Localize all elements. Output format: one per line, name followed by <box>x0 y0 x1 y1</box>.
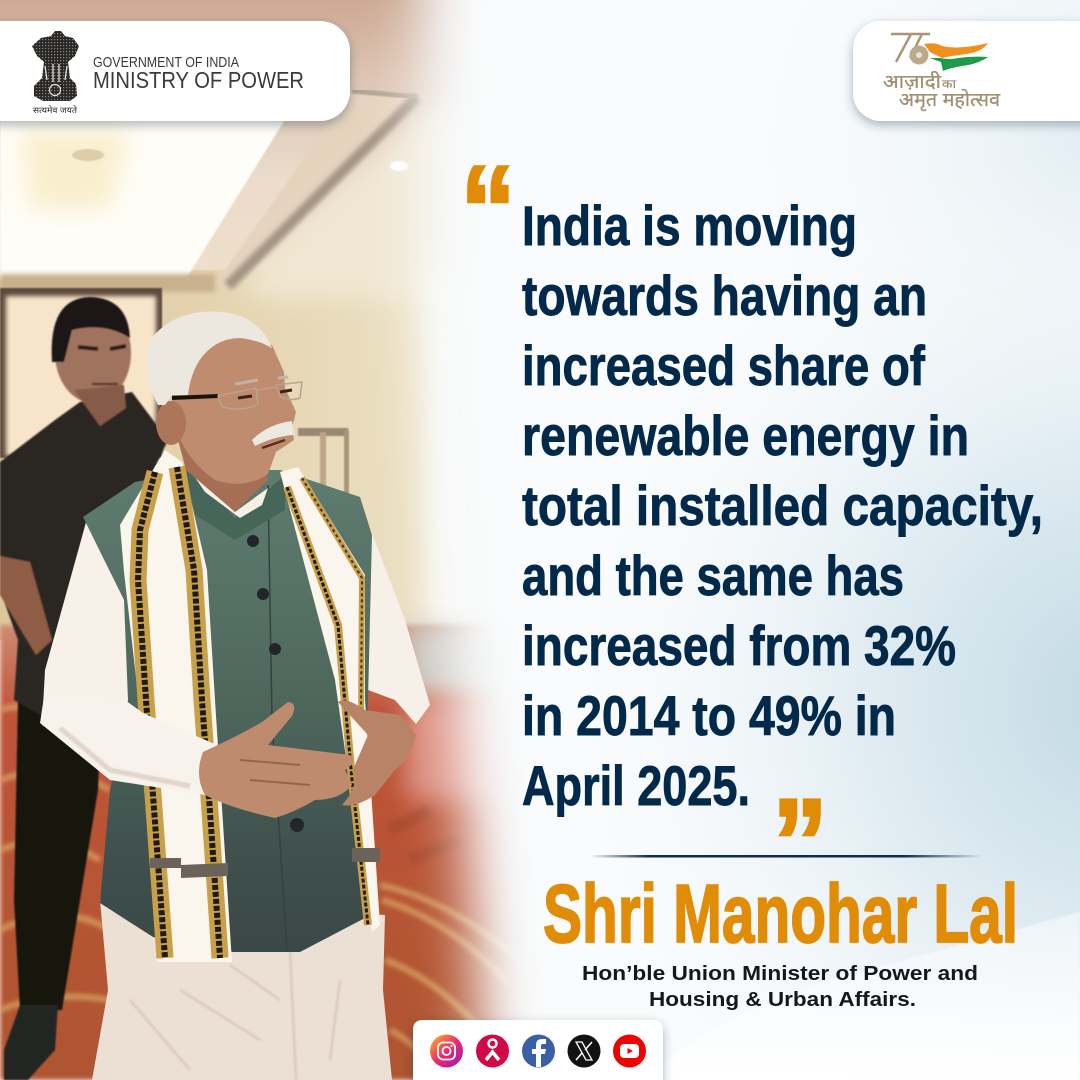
quote text: in 2014 to 49% in <box>522 684 896 747</box>
opening quotation mark: “ <box>460 141 516 280</box>
icon: youtube <box>613 1034 646 1068</box>
quote text: increased share of <box>522 334 925 397</box>
quote text: April 2025. <box>522 754 750 817</box>
quote text: increased from 32% <box>522 614 956 677</box>
logo wordmark: अमृत महोत्सव <box>899 88 1000 112</box>
divider <box>590 855 982 858</box>
logo wordmark <box>883 70 1000 112</box>
jacket buttons <box>247 535 304 832</box>
dhoti <box>92 900 392 1080</box>
kurta right sleeve <box>365 515 430 724</box>
speaker designation <box>582 963 978 1011</box>
hair <box>146 312 272 405</box>
icon: facebook <box>522 1034 555 1068</box>
kurta forearm and cuff <box>40 690 217 795</box>
ear <box>156 401 186 445</box>
kurta upper arm <box>42 515 135 740</box>
main figure: Shri Manohar Lal <box>40 312 430 1080</box>
logo: 75 and flag <box>891 34 988 71</box>
stole: right <box>280 467 380 932</box>
collar <box>184 462 285 540</box>
head <box>172 335 296 484</box>
quote text: and the same has <box>522 544 904 607</box>
logo wordmark: आज़ादी <box>883 70 942 93</box>
social media bar <box>413 1020 663 1080</box>
organisation name: MINISTRY OF POWER <box>93 67 304 93</box>
logo wordmark: का <box>942 77 957 91</box>
quote text: renewable energy in <box>522 404 969 467</box>
header panel: Azadi Ka Amrit Mahotsav <box>853 21 1080 121</box>
quote text: towards having an <box>522 264 927 327</box>
stole: left <box>120 450 232 962</box>
icon: instagram <box>430 1034 463 1068</box>
icon: state emblem <box>32 31 79 115</box>
vest <box>83 470 372 952</box>
speaker designation: Hon’ble Union Minister of Power and <box>582 963 978 985</box>
background man <box>0 297 168 1080</box>
closing quotation mark: ” <box>772 774 828 913</box>
speaker designation: Housing & Urban Affairs. <box>649 989 916 1011</box>
hands <box>199 702 353 818</box>
glasses <box>172 382 302 409</box>
eyebrow and eye <box>235 377 288 384</box>
photo background: blurred hallway <box>0 0 524 1080</box>
icon: person badge <box>476 1034 509 1068</box>
moustache <box>252 421 294 446</box>
quote text <box>522 194 1043 817</box>
organisation name <box>93 55 304 93</box>
neck <box>178 440 268 512</box>
icon: X <box>568 1034 600 1068</box>
quote text: India is moving <box>522 194 857 257</box>
header panel: Government of India <box>0 21 350 121</box>
organisation name: GOVERNMENT OF INDIA <box>93 55 239 71</box>
emblem motto: सत्यमेव जयते <box>33 105 77 115</box>
